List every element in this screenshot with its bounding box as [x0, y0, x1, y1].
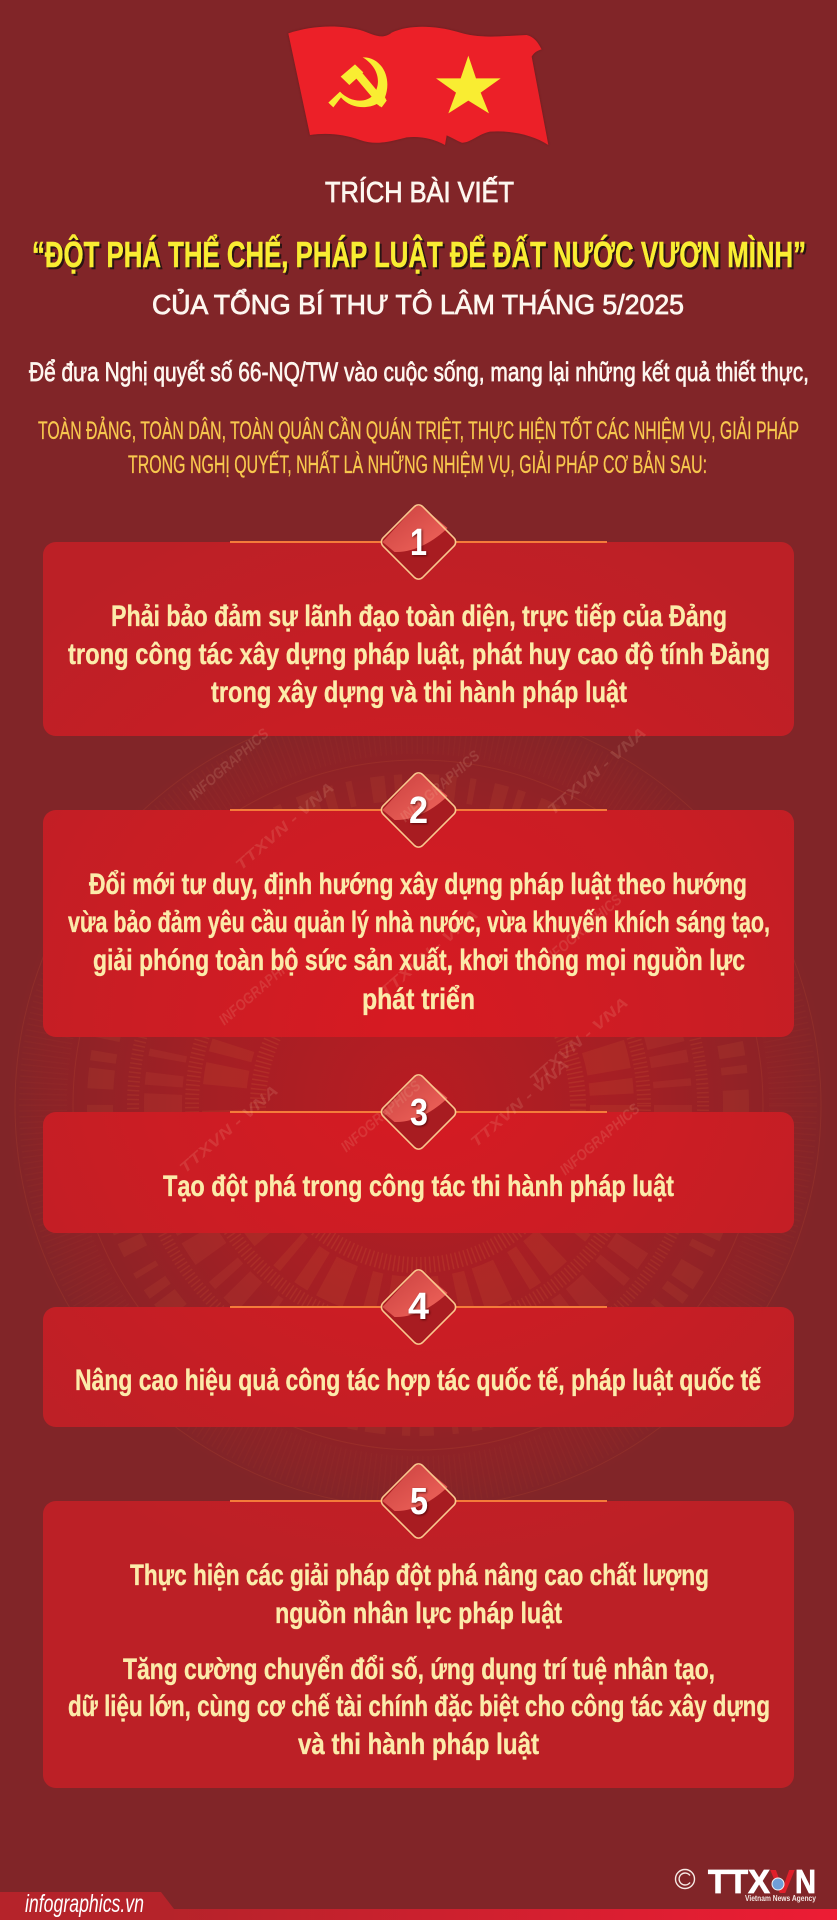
- panel 1 text: trong xây dựng và thi hành pháp luật: [211, 676, 627, 709]
- watermarks: [176, 724, 650, 1179]
- number badge 1: [379, 502, 458, 582]
- watermarks: TTXVN - VNA: [467, 1056, 573, 1151]
- watermarks: TTXVN - VNA: [544, 724, 650, 819]
- watermarks: TTXVN - VNA: [232, 779, 338, 874]
- logo: TTXVN: Vietnam News Agency: [745, 1893, 816, 1903]
- watermarks: TTXVN - VNA: [176, 1082, 282, 1177]
- number badge 1: 1: [410, 522, 427, 564]
- watermarks: TTXVN - VNA: [376, 906, 482, 1001]
- intro highlight text: [38, 415, 799, 479]
- bronze drum background pattern: [8, 695, 828, 1515]
- panel 5 text: [68, 1559, 770, 1761]
- panel 1: [43, 502, 794, 736]
- footer strip: [160, 1909, 837, 1920]
- icon: globe: [772, 1878, 784, 1890]
- logo: TTXVN: N: [795, 1863, 816, 1900]
- number badge 3: 3: [410, 1092, 428, 1134]
- watermarks: INFOGRAPHICS: [539, 891, 625, 970]
- footer tab: infographics.vn: infographics.vn: [25, 1890, 144, 1918]
- icon: copyright: [676, 1870, 694, 1888]
- number badge 4: 4: [408, 1286, 429, 1328]
- heading: excerpt label: TRÍCH BÀI VIẾT: [325, 175, 514, 209]
- icon: hammer and sickle: [328, 57, 387, 107]
- heading: author and date: CỦA TỔNG BÍ THƯ TÔ LÂM THÁNG 5/2025: [152, 288, 684, 320]
- number badge 2: [379, 770, 458, 850]
- flag: [288, 26, 548, 145]
- panel 5 text: và thi hành pháp luật: [298, 1728, 539, 1761]
- panel 3 text: Tạo đột phá trong công tác thi hành pháp luật: [163, 1170, 674, 1203]
- panel 2 text: phát triển: [362, 983, 475, 1016]
- panel 2 text: [68, 868, 770, 1016]
- panel 5 text: nguồn nhân lực pháp luật: [275, 1597, 562, 1630]
- logo: TTXVN: V: [770, 1863, 795, 1900]
- icon: star: [436, 56, 501, 113]
- panel 1 text: [68, 600, 770, 709]
- panel 5: [43, 1461, 794, 1788]
- watermarks: INFOGRAPHICS: [186, 725, 272, 804]
- watermarks: INFOGRAPHICS: [216, 950, 302, 1029]
- watermarks: INFOGRAPHICS: [557, 1100, 643, 1179]
- watermarks: INFOGRAPHICS: [397, 747, 483, 826]
- logo: TTXVN: [676, 1863, 816, 1903]
- panel 4: [43, 1267, 794, 1427]
- number badge 5: 5: [410, 1481, 428, 1523]
- panel 3: [43, 1072, 794, 1233]
- number badge 2: 2: [409, 790, 428, 832]
- logo: TTXVN: TTX: [708, 1863, 770, 1900]
- number badge 5: [379, 1461, 458, 1541]
- watermarks: TTXVN - VNA: [526, 994, 632, 1089]
- number badge 4: [379, 1267, 458, 1347]
- watermarks: INFOGRAPHICS: [338, 1077, 424, 1156]
- panel 2: [43, 770, 794, 1037]
- number badge 3: [379, 1072, 458, 1152]
